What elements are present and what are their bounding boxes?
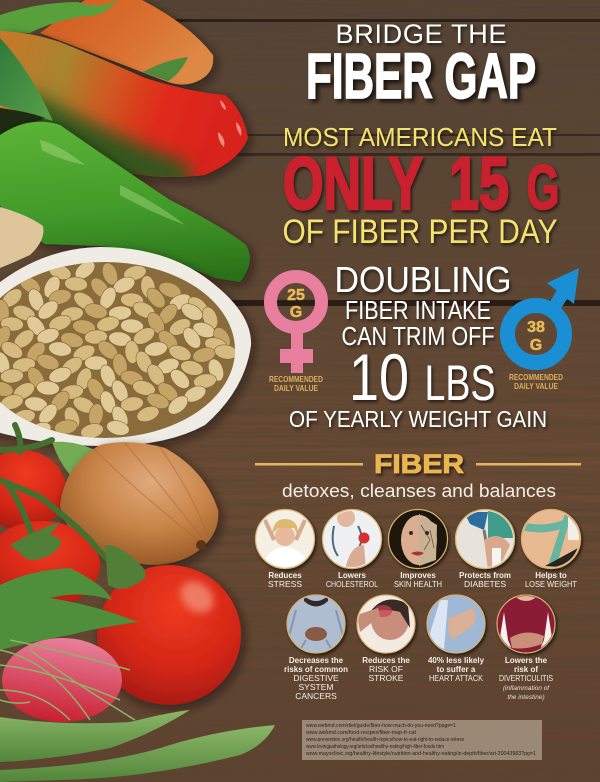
headline: only 15 g per day: G [526, 153, 560, 223]
benefit: diabetes: Protects from [459, 571, 511, 580]
pepper glints [218, 100, 241, 147]
benefit: cholesterol: CHOLESTEROL [326, 579, 378, 589]
title [306, 19, 536, 112]
benefit: stress [256, 510, 314, 589]
benefit: lose weight [522, 510, 580, 589]
icon: male symbol with 38 g: 38 [527, 319, 545, 336]
icon: female symbol with 25 g: 25 [287, 287, 305, 304]
doubling fiber message [289, 259, 547, 432]
wheat grains [0, 257, 239, 441]
sources box: www.mayoclinic.org/healthy-lifestyle/nutrition-and-healthy-eating/in-depth/fiber/art-20043983?pg=1 [306, 751, 536, 757]
benefit: heart attack: 40% less likely [428, 656, 485, 665]
herb leaves [0, 568, 138, 650]
benefit: lose weight: LOSE WEIGHT [525, 579, 577, 589]
benefit: stress: Reduces [268, 571, 302, 580]
red pepper [0, 31, 248, 177]
onion ribs [95, 443, 208, 540]
leaf [0, 38, 53, 121]
headline: only 15 g per day: OF FIBER PER DAY [282, 213, 558, 251]
large tomato [97, 565, 241, 705]
doubling fiber message: LBS [424, 355, 496, 411]
doubling fiber message: CAN TRIM OFF [342, 321, 494, 351]
icon: female symbol with 25 g: DAILY VALUE [274, 383, 318, 393]
carrot [40, 0, 213, 85]
headline: only 15 g per day: MOST AMERICANS EAT [283, 122, 557, 152]
headline: only 15 g per day: ONLY [283, 142, 423, 225]
benefit: diverticulitis: the intestine) [507, 694, 545, 701]
benefit: heart attack [427, 595, 485, 683]
wheat base [0, 262, 235, 438]
benefit: skin health: Improves [400, 571, 436, 580]
tomato upper left [0, 450, 66, 530]
fiber heading [255, 449, 581, 501]
doubling fiber message: FIBER INTAKE [345, 295, 491, 325]
doubling fiber message: OF YEARLY WEIGHT GAIN [289, 406, 547, 432]
benefit: lose weight: Helps to [535, 571, 567, 580]
garlic [0, 207, 43, 268]
benefit: cholesterol: Lowers [338, 571, 367, 580]
leaf near tomato [52, 442, 97, 475]
icon: female symbol with 25 g [269, 276, 323, 393]
benefit: heart attack: HEART ATTACK [429, 673, 483, 683]
icon: male symbol with 38 g [508, 268, 579, 391]
onion root [196, 540, 206, 550]
sources box: www.prevention.org/health/health-topics/how-to-eat-right-to-reduce-stress [306, 737, 464, 743]
benefit: diverticulitis: DIVERTICULITIS [499, 673, 553, 683]
icon: male symbol with 38 g: RECOMMENDED [509, 372, 563, 382]
fiber heading: FIBER [374, 449, 464, 479]
benefit: skin health: SKIN HEALTH [394, 579, 442, 589]
vegetables: onion, tomatoes, radish and beans [0, 425, 275, 782]
green pepper [0, 122, 250, 282]
benefit: diverticulitis: risk of [514, 665, 538, 674]
benefit: digestive cancers: risks of common [284, 665, 348, 674]
benefit: diabetes [456, 510, 518, 589]
pepper shade [20, 90, 190, 190]
headline: only 15 g per day: 15 [449, 142, 509, 225]
sources box: www.webmd.com/diet/guide/fiber-how-much-do-you-need?page=1 [306, 723, 456, 729]
title: BRIDGE THE [336, 19, 506, 49]
icon: female symbol with 25 g: G [290, 304, 302, 321]
benefit: diabetes: DIABETES [464, 579, 506, 589]
benefit: diverticulitis [497, 594, 555, 701]
doubling fiber message: DOUBLING [334, 259, 512, 300]
benefit: digestive cancers: CANCERS [295, 691, 337, 701]
bowl [0, 247, 251, 446]
doubling fiber message: 10 [349, 340, 409, 414]
green bean top [0, 0, 118, 33]
fiber heading: detoxes, cleanses and balances [282, 480, 556, 501]
onion [60, 442, 218, 565]
headline: only 15 g per day [282, 122, 560, 251]
green bean lower [0, 725, 275, 782]
benefit: stroke: Reduces the [362, 656, 410, 665]
sources box: www.lovingpathology.org/articles/healthy-eating/high-fiber-foods.htm [306, 744, 444, 750]
icon: male symbol with 38 g: DAILY VALUE [514, 381, 558, 391]
vine stems [0, 425, 132, 578]
small green tip [143, 57, 188, 81]
benefit: stroke: STROKE [369, 673, 404, 683]
vine calyx [10, 522, 146, 589]
tomato highlight [174, 575, 220, 619]
tomato middle left [0, 521, 100, 609]
benefit: cholesterol [322, 509, 382, 589]
green beans [0, 710, 190, 762]
benefit: diverticulitis: (inflammation of [503, 685, 550, 692]
sources box: www.webmd.com/food-recipes/fiber-map-fr-cat [306, 730, 417, 736]
benefit: diverticulitis: Lowers the [505, 656, 548, 665]
dark gap [0, 108, 45, 135]
icon: female symbol with 25 g: RECOMMENDED [269, 374, 323, 384]
vegetables: peppers and carrot [0, 0, 250, 282]
benefit: digestive cancers: SYSTEM [299, 682, 333, 692]
green pepper highlight [40, 140, 185, 225]
benefit: digestive cancers: DIGESTIVE [293, 673, 339, 683]
benefit: digestive cancers: Decreases the [289, 656, 344, 665]
benefit: skin health [388, 510, 448, 589]
benefit: digestive cancers [284, 595, 348, 701]
benefit: stress: STRESS [268, 579, 302, 589]
thin herb sprigs [0, 640, 135, 720]
benefit: heart attack: to suffer a [437, 665, 476, 674]
benefit: stroke [357, 595, 415, 683]
bowl of wheat [0, 247, 251, 446]
sources box [302, 720, 542, 760]
benefit: stroke: RISK OF [369, 664, 403, 674]
icon: male symbol with 38 g: G [530, 337, 542, 354]
radish [2, 638, 122, 722]
